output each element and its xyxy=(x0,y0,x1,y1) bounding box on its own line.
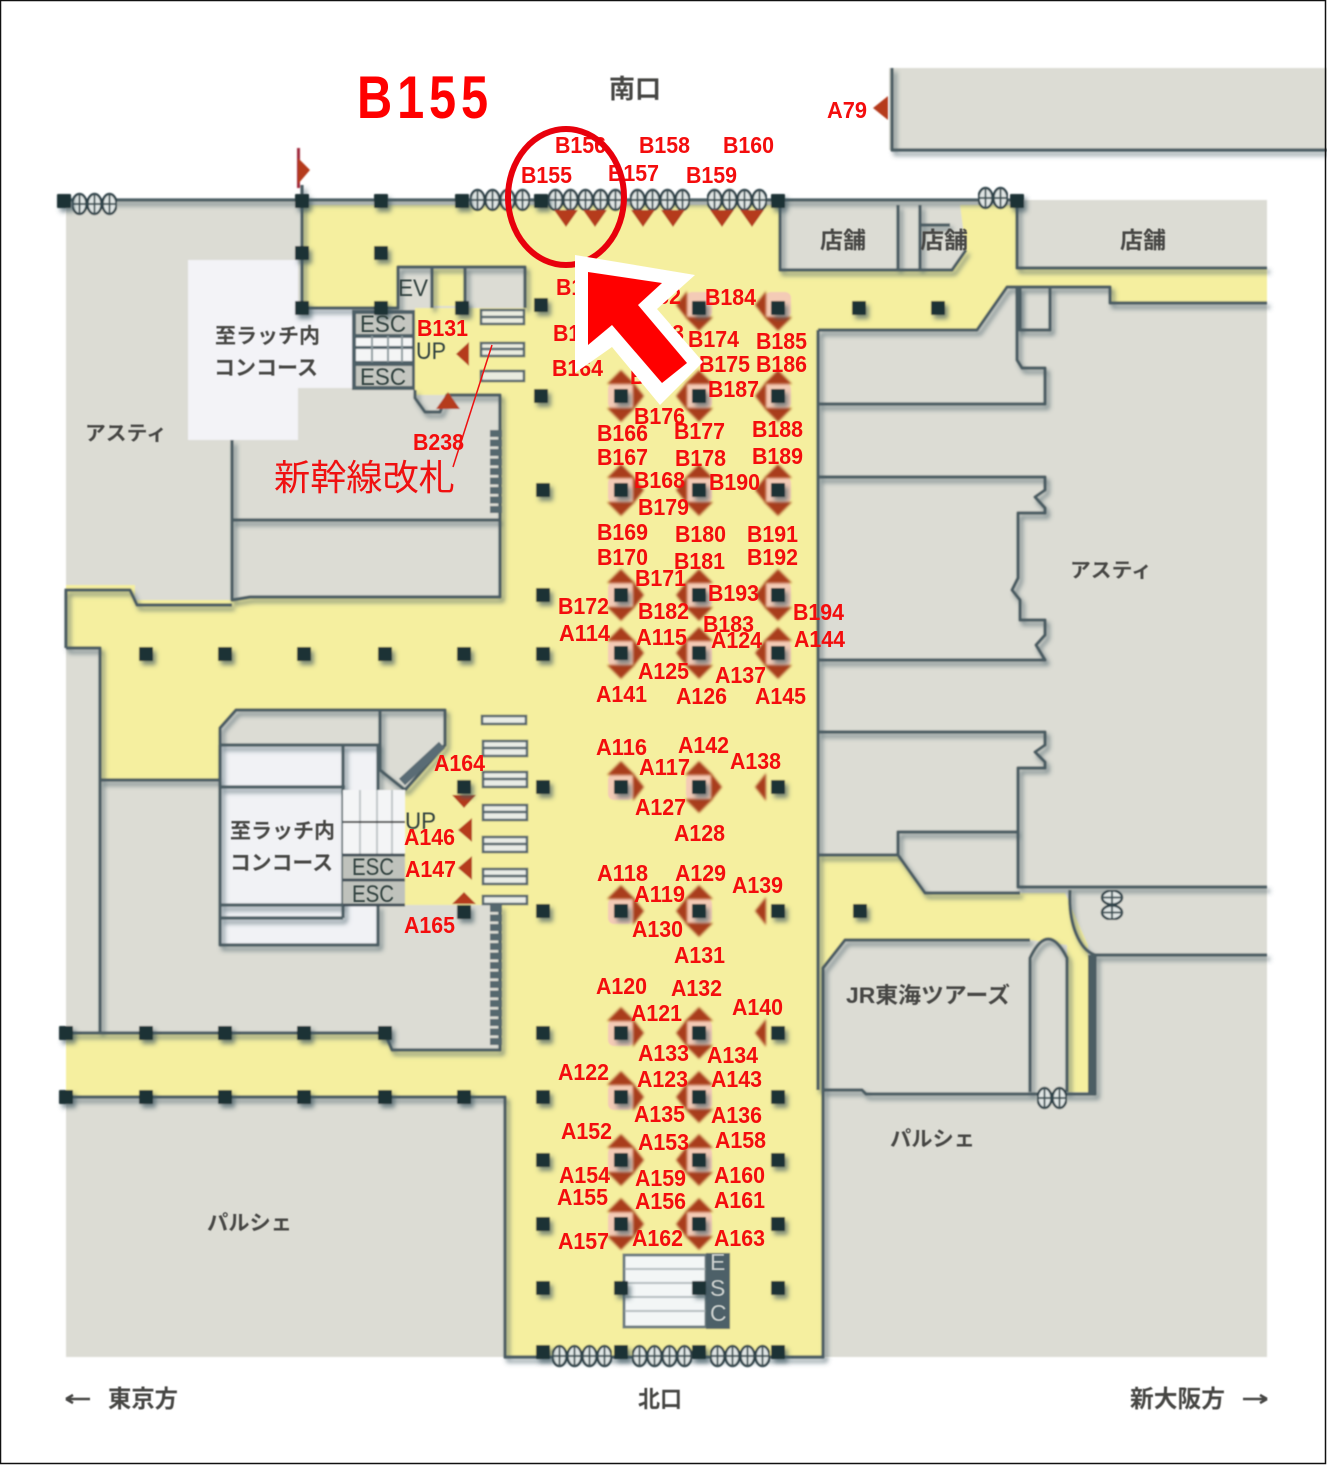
upper hall codes: B177 xyxy=(674,418,725,444)
upper hall codes: B173 xyxy=(633,320,684,346)
middle hall codes: A145 xyxy=(755,683,806,709)
upper hall codes: B185 xyxy=(756,328,807,354)
Marche label left: パルシェ xyxy=(207,1212,292,1235)
arrow pointing to B155 xyxy=(575,255,703,405)
Tokyo direction arrow xyxy=(66,1395,90,1403)
upper hall codes: B192 xyxy=(747,544,798,570)
lower hall codes: A120 xyxy=(596,973,647,999)
escalators upper xyxy=(352,310,415,390)
shop labels: 店舗 xyxy=(920,227,968,253)
middle hall codes: A141 xyxy=(596,681,647,707)
lower hall codes: A159 xyxy=(635,1165,686,1191)
middle hall codes: A114 xyxy=(559,620,610,646)
upper hall codes: B166 xyxy=(597,420,648,446)
highlight circle xyxy=(508,129,624,265)
middle hall codes: A137 xyxy=(715,662,766,688)
upper hall codes xyxy=(413,274,844,637)
concourse label upper: コンコース xyxy=(214,357,318,380)
lower hall codes: A143 xyxy=(711,1066,762,1092)
panel: shop block by south gate xyxy=(780,205,966,270)
middle hall codes: A139 xyxy=(732,872,783,898)
middle hall codes: A129 xyxy=(675,860,726,886)
upper hall codes: B189 xyxy=(752,443,803,469)
upper hall codes: B188 xyxy=(752,416,803,442)
escalator north xyxy=(624,1253,730,1329)
hall direction triangles xyxy=(607,291,792,1250)
middle hall codes: A126 xyxy=(676,683,727,709)
middle hall codes: A125 xyxy=(638,658,689,684)
upper hall codes: B172 xyxy=(558,593,609,619)
upper hall codes: B168 xyxy=(634,467,685,493)
lower hall codes: A152 xyxy=(561,1118,612,1144)
panel: grey building floor xyxy=(66,200,1267,1357)
middle hall codes: A144 xyxy=(794,626,845,652)
south gate codes: B155 xyxy=(521,162,572,188)
concourse label upper xyxy=(214,325,320,380)
panel: yellow concourse floor xyxy=(66,205,1267,1357)
lower hall codes: A162 xyxy=(632,1225,683,1251)
escalator labels lower: ESC xyxy=(352,854,394,881)
south gate codes: B157 xyxy=(608,160,659,186)
thick wall by east corridor xyxy=(1088,955,1096,1095)
middle hall codes: A116 xyxy=(596,734,647,760)
escalator labels lower: ESC xyxy=(352,881,394,908)
lower hall codes: A158 xyxy=(715,1127,766,1153)
title: B155: B155 xyxy=(357,64,493,131)
escalator label north xyxy=(710,1249,727,1326)
escalators lower xyxy=(343,790,405,905)
stairs: vertical hatch xyxy=(490,430,502,1045)
south gate codes xyxy=(521,97,867,188)
upper hall codes: B178 xyxy=(675,445,726,471)
Shin-Osaka direction: 新大阪方 xyxy=(1130,1386,1225,1413)
benches and stair markers lower xyxy=(482,716,527,904)
middle hall codes: A131 xyxy=(674,942,725,968)
panel: lift room xyxy=(398,267,525,308)
middle hall codes: A164 xyxy=(434,750,485,776)
south gate codes: B160 xyxy=(723,132,774,158)
upper hall codes: B163 xyxy=(553,320,604,346)
wall stub at upper-left flag xyxy=(297,148,300,188)
concourse label lower: コンコース xyxy=(230,852,333,875)
concourse label lower: 至ラッチ内 xyxy=(230,820,335,843)
panel: white concourse zone lower xyxy=(220,745,378,945)
escalator label north: E xyxy=(710,1249,725,1275)
upper hall codes: B194 xyxy=(793,599,844,625)
upper hall codes: B238 xyxy=(413,429,464,455)
upper hall codes: B175 xyxy=(699,351,750,377)
upper hall codes: B193 xyxy=(708,580,759,606)
middle hall codes xyxy=(404,620,845,968)
escalator labels lower xyxy=(352,854,394,908)
middle hall codes: A115 xyxy=(636,624,687,650)
lower hall codes: A156 xyxy=(635,1188,686,1214)
lower hall codes: A140 xyxy=(732,994,783,1020)
upper hall codes: B176 xyxy=(634,403,685,429)
upper hall codes: B181 xyxy=(674,548,725,574)
middle hall codes: A165 xyxy=(404,912,455,938)
middle hall codes: A127 xyxy=(635,794,686,820)
upper hall codes: B190 xyxy=(709,469,760,495)
shop labels: 店舗 xyxy=(1120,227,1166,253)
upper hall codes: B174 xyxy=(688,326,739,352)
equipment labels xyxy=(352,275,727,1326)
south exit label: 南口 xyxy=(609,74,661,104)
middle hall codes: A117 xyxy=(639,754,690,780)
lower hall codes: A157 xyxy=(558,1228,609,1254)
red shop code labels xyxy=(404,97,867,1254)
middle hall codes: A130 xyxy=(632,916,683,942)
upper hall codes: B131 xyxy=(417,315,468,341)
panel: upper right platform block xyxy=(889,68,1327,150)
escalator label north: C xyxy=(710,1300,727,1326)
lower hall codes: A121 xyxy=(631,1000,682,1026)
north exit label: 北口 xyxy=(638,1386,682,1412)
Tokyo direction: 東京方 xyxy=(108,1386,178,1413)
concourse label upper: 至ラッチ内 xyxy=(215,325,320,348)
lower hall codes xyxy=(557,973,783,1254)
escalator labels upper xyxy=(360,311,406,391)
middle hall codes: A124 xyxy=(711,627,762,653)
escalator labels upper: ESC xyxy=(360,311,406,338)
JR Tokai Tours label: JR東海ツアーズ xyxy=(846,983,1010,1008)
middle hall codes: A128 xyxy=(674,820,725,846)
lower hall codes: A123 xyxy=(637,1066,688,1092)
lower hall codes: A134 xyxy=(707,1042,758,1068)
leader line to Shinkansen gate xyxy=(453,345,492,467)
middle hall codes: A146 xyxy=(404,824,455,850)
upper hall codes: B170 xyxy=(597,544,648,570)
lower hall codes: A163 xyxy=(714,1225,765,1251)
upper hall codes: B191 xyxy=(747,521,798,547)
lower hall codes: A153 xyxy=(638,1129,689,1155)
columns xyxy=(57,194,1024,1359)
ASTY label left: アスティ xyxy=(85,423,167,445)
lower hall codes: A135 xyxy=(634,1101,685,1127)
south gate codes: A79 xyxy=(827,97,867,123)
lower hall codes: A132 xyxy=(671,975,722,1001)
middle hall codes: A118 xyxy=(597,860,648,886)
upper hall codes: B182 xyxy=(638,598,689,624)
lift label: EV xyxy=(398,275,428,302)
lower hall codes: A160 xyxy=(714,1162,765,1188)
upper hall codes: B162 xyxy=(630,283,681,309)
upper hall codes: B165 xyxy=(630,363,681,389)
upper hall codes: B167 xyxy=(597,444,648,470)
upper hall codes: B184 xyxy=(705,284,756,310)
benches and stair markers upper xyxy=(481,310,524,381)
lower hall codes: A133 xyxy=(638,1040,689,1066)
lower hall codes: A154 xyxy=(559,1162,610,1188)
lower hall codes: A155 xyxy=(557,1184,608,1210)
middle hall codes: A142 xyxy=(678,732,729,758)
Shin-Osaka direction arrow xyxy=(1243,1395,1267,1403)
upper hall codes: B183 xyxy=(703,611,754,637)
upper hall codes: B186 xyxy=(756,351,807,377)
upper hall codes: B161 xyxy=(556,274,607,300)
panel: arch passage xyxy=(1030,939,1067,1092)
upper hall codes: B179 xyxy=(638,494,689,520)
middle hall codes: A138 xyxy=(730,748,781,774)
panel: lift room yellow bay xyxy=(432,269,465,306)
Shinkansen gate annotation: 新幹線改札 xyxy=(274,457,455,498)
south gate codes: B158 xyxy=(639,132,690,158)
lower hall codes: A136 xyxy=(711,1102,762,1128)
hall marker halos xyxy=(608,292,791,1237)
shop labels xyxy=(820,227,1166,253)
concourse label lower xyxy=(230,820,335,875)
middle hall codes: A119 xyxy=(634,881,685,907)
ASTY label right: アスティ xyxy=(1070,560,1152,582)
lower hall codes: A122 xyxy=(558,1059,609,1085)
south gate and side triangles xyxy=(298,96,888,904)
upper hall codes: B171 xyxy=(635,565,686,591)
upper hall codes: B164 xyxy=(552,355,603,381)
south gate codes: B159 xyxy=(686,162,737,188)
shop labels: 店舗 xyxy=(820,227,866,253)
upper hall codes: B187 xyxy=(708,376,759,402)
escalator label north: S xyxy=(710,1275,725,1301)
diagonal door bar xyxy=(402,745,442,782)
upper hall codes: B169 xyxy=(597,519,648,545)
up label upper: UP xyxy=(416,338,446,365)
Marche label right: パルシェ xyxy=(890,1128,975,1151)
escalator labels upper: ESC xyxy=(360,364,406,391)
up label lower: UP xyxy=(405,808,436,835)
south gate codes: B156 xyxy=(555,132,606,158)
lower hall codes: A161 xyxy=(714,1187,765,1213)
panel: white concourse zone upper xyxy=(188,260,352,440)
ticket gates xyxy=(72,186,1124,1368)
upper hall codes: B180 xyxy=(675,521,726,547)
middle hall codes: A147 xyxy=(405,856,456,882)
